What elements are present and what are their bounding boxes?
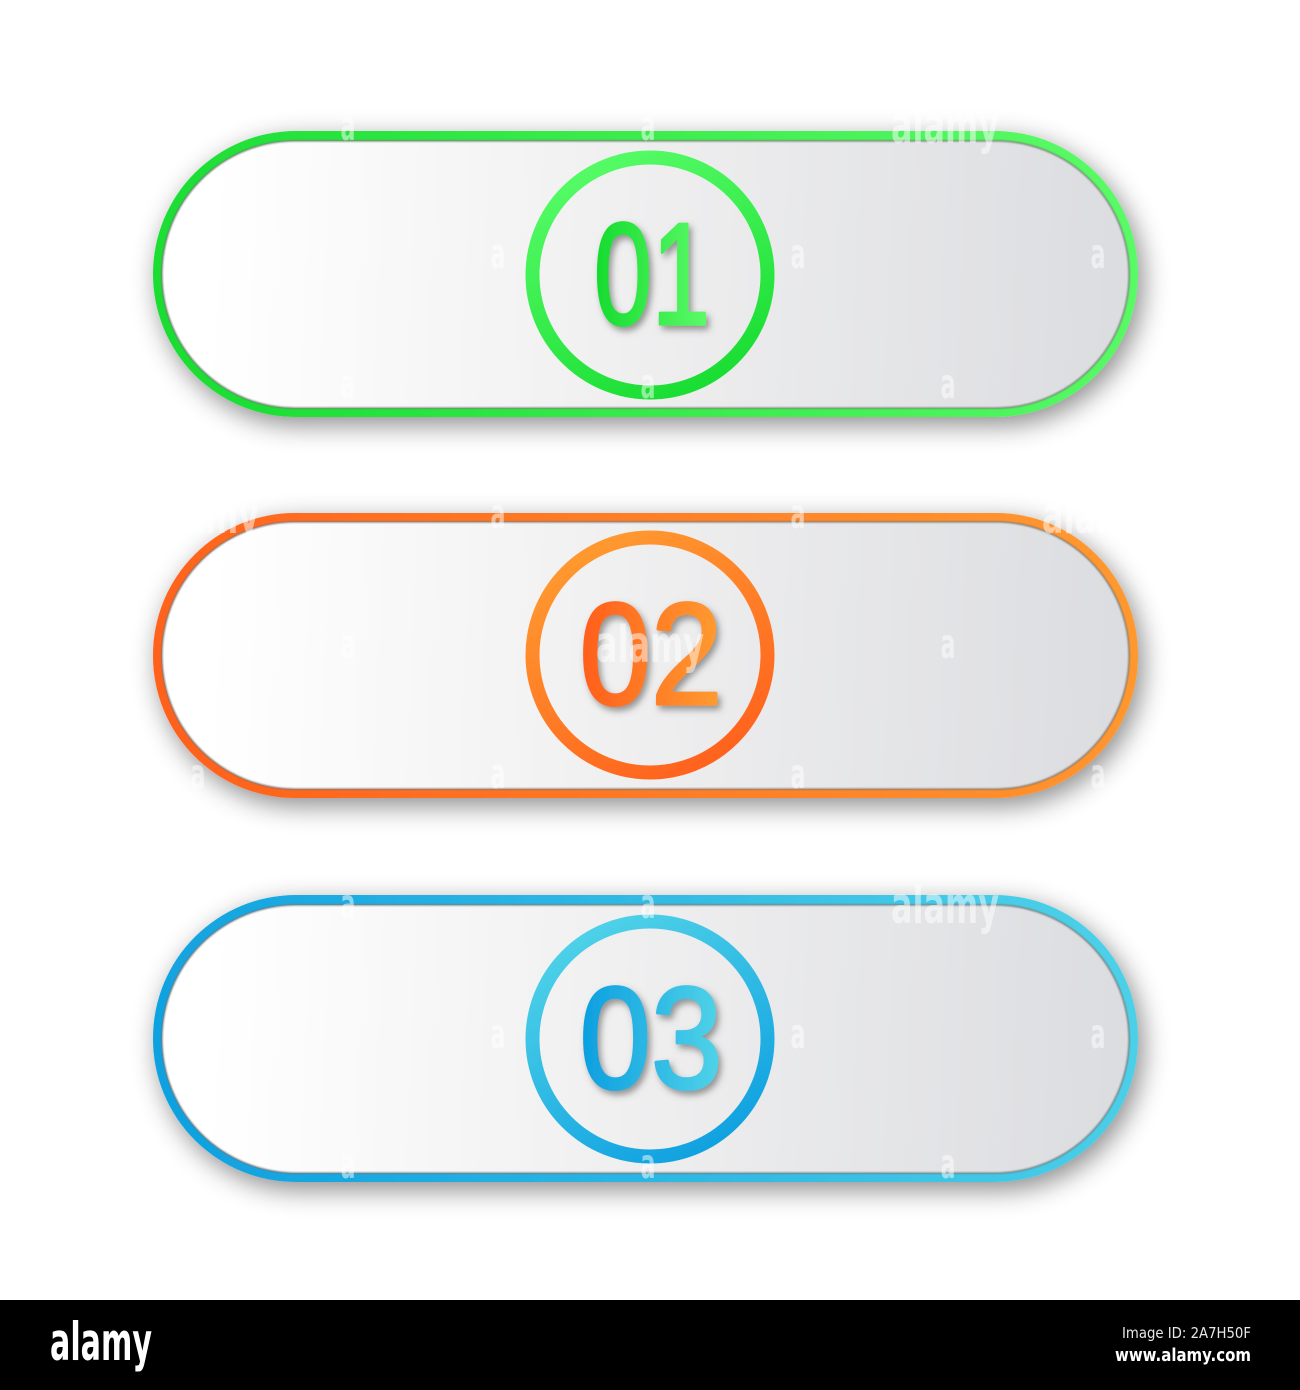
number 02: 02 (580, 573, 722, 735)
pill inner fill (162, 905, 1129, 1173)
number ring 01 (532, 158, 768, 392)
pill outline orange (153, 513, 1138, 798)
number ring 02 (532, 538, 768, 772)
footer bar (0, 1300, 1300, 1390)
number 01: 01 (594, 193, 710, 355)
watermark overlay: a (490, 750, 506, 798)
pill outline blue (153, 895, 1138, 1182)
watermark overlay: a (790, 490, 806, 538)
watermark overlay: alamy (891, 877, 999, 936)
watermark overlay: a (340, 620, 356, 668)
watermark overlay: a (340, 880, 356, 928)
pill outline green (153, 131, 1138, 417)
watermark overlay (151, 97, 1150, 1188)
panel: banner 03 blue (153, 895, 1138, 1182)
watermark overlay: a (940, 620, 956, 668)
watermark overlay: a (640, 880, 656, 928)
watermark overlay: a (790, 1010, 806, 1058)
footer logo: alamy (50, 1312, 152, 1373)
watermark overlay: alamy (151, 487, 259, 546)
watermark overlay: a (1090, 1010, 1106, 1058)
panel: banner 01 green (153, 131, 1138, 417)
watermark overlay: a (940, 1140, 956, 1188)
watermark overlay: a (490, 490, 506, 538)
pill inner fill (162, 141, 1129, 408)
website: www.alamy.com (1115, 1345, 1251, 1366)
watermark overlay: a (640, 1140, 656, 1188)
watermark overlay: a (190, 750, 206, 798)
watermark overlay: a (790, 230, 806, 278)
watermark overlay: alamy (1042, 487, 1150, 546)
watermark overlay: a (490, 1010, 506, 1058)
watermark overlay: alamy (596, 616, 704, 675)
pill inner edge shade (162, 905, 1129, 1173)
pill inner fill (162, 522, 1129, 789)
watermark overlay: alamy (891, 97, 999, 156)
watermark overlay: a (790, 750, 806, 798)
pill inner edge shade (162, 141, 1129, 408)
watermark overlay: a (640, 360, 656, 408)
number 03: 03 (580, 957, 722, 1119)
watermark overlay: a (490, 230, 506, 278)
watermark overlay: a (340, 102, 356, 150)
watermark overlay: a (340, 360, 356, 408)
watermark overlay: a (940, 360, 956, 408)
watermark overlay: a (640, 102, 656, 150)
watermark overlay: a (340, 1140, 356, 1188)
image id: Image ID: 2A7H50F (1122, 1324, 1251, 1342)
watermark overlay: a (1090, 230, 1106, 278)
watermark overlay: a (1090, 750, 1106, 798)
number ring 03 (532, 922, 768, 1156)
panel: banner 02 orange (153, 513, 1138, 798)
pill inner edge shade (162, 522, 1129, 789)
